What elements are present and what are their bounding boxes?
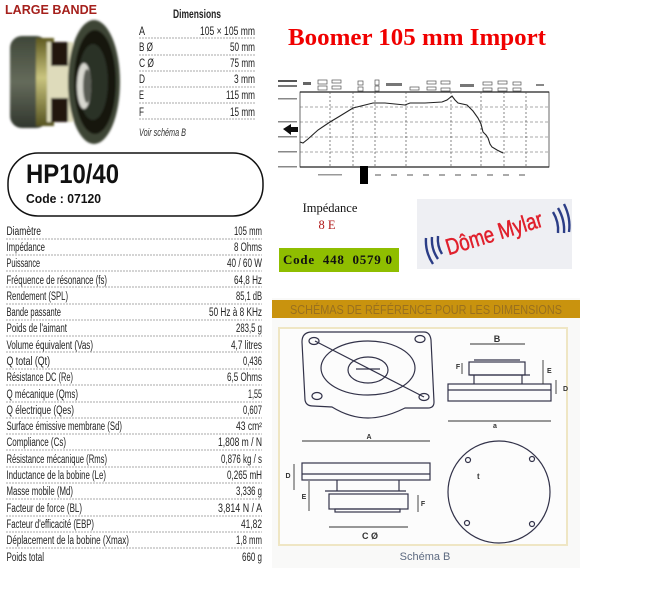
- table: specifications: 41,82: [241, 519, 262, 531]
- caption: schema B: Schéma B: [400, 551, 450, 563]
- table: dimensions: B Ø: [139, 40, 153, 54]
- diagram: side view bottom: [285, 434, 430, 541]
- table: specifications: Surface émissive membrane (Sd): [6, 421, 122, 433]
- table: specifications: Facteur de force (BL): [6, 503, 82, 515]
- table: specifications: Résistance mécanique (Rms): [6, 454, 107, 466]
- table: specifications: 0,436: [243, 356, 262, 368]
- badge: dome mylar: Dôme Mylar: [442, 206, 546, 260]
- diagram: side view top: [448, 334, 568, 430]
- table: specifications: Q électrique (Qes): [6, 405, 74, 417]
- diagram: round view: [448, 441, 550, 543]
- table: specifications: 40 / 60 W: [227, 258, 262, 270]
- diagram: side view top: B: [494, 334, 501, 344]
- table: specifications: Inductance de la bobine (Le): [6, 470, 106, 482]
- table: dimensions: D: [139, 72, 145, 86]
- table: dimensions: 75 mm: [230, 56, 255, 70]
- table: dimensions: 50 mm: [230, 40, 255, 54]
- diagram: front plate: [302, 332, 434, 418]
- diagram: side view bottom: A: [366, 434, 372, 441]
- diagram: side view bottom: D: [285, 473, 291, 480]
- table: specifications: 1,8 mm: [236, 535, 262, 547]
- diagram: side view top: F: [456, 364, 461, 371]
- table: dimensions: 3 mm: [234, 72, 255, 86]
- table: dimensions: 105 × 105 mm: [200, 24, 255, 38]
- table: specifications: 64,8 Hz: [234, 275, 262, 287]
- table: specifications: Fréquence de résonance (fs): [6, 275, 107, 287]
- diagram: side view bottom: F: [421, 501, 426, 508]
- diagram: side view top: E: [547, 368, 552, 375]
- table: specifications: 50 Hz à 8 KHz: [209, 307, 262, 319]
- table: specifications: Poids de l'aimant: [6, 323, 68, 335]
- table: specifications: Puissance: [6, 258, 40, 270]
- table: specifications: 660 g: [242, 552, 262, 564]
- diagram: side view top: D: [563, 386, 568, 393]
- table: specifications: 1,808 m / N: [218, 437, 262, 449]
- table: dimensions: [139, 24, 255, 139]
- model badge: HP10/40: [8, 153, 263, 216]
- table: dimensions: 115 mm: [226, 88, 255, 102]
- table: specifications: 43 cm²: [236, 421, 262, 433]
- table: specifications: 3,814 N / A: [218, 503, 262, 515]
- badge: product code: Code 448 0579 0: [283, 252, 392, 267]
- table: specifications: Q total (Qt): [6, 356, 50, 368]
- label: impedance: 8 E: [318, 218, 336, 232]
- title: Boomer 105 mm Import: [288, 25, 546, 51]
- icon: left arrow: [283, 124, 298, 135]
- table: dimensions: Voir schéma B: [139, 127, 186, 139]
- table: specifications: 85,1 dB: [236, 291, 262, 303]
- table: specifications: 283,5 g: [236, 323, 262, 335]
- table: specifications: Résistance DC (Re): [6, 372, 73, 384]
- table: specifications: [6, 226, 262, 564]
- diagram: side view bottom: E: [302, 494, 307, 501]
- table: specifications: 6,5 Ohms: [227, 372, 262, 384]
- table: dimensions: 15 mm: [230, 105, 255, 119]
- table: specifications: Compliance (Cs): [6, 437, 66, 449]
- heading: dimensions: Dimensions: [173, 7, 221, 21]
- table: specifications: Rendement (SPL): [6, 291, 68, 303]
- table: specifications: 4,7 litres: [231, 340, 262, 352]
- table: specifications: 1,55: [248, 389, 262, 401]
- label: impedance: Impédance: [303, 201, 358, 215]
- chart: frequency response: [278, 80, 549, 184]
- panel: reference schematics: [272, 298, 580, 568]
- table: specifications: Q mécanique (Qms): [6, 389, 78, 401]
- table: specifications: Diamètre: [6, 226, 41, 238]
- table: dimensions: E: [139, 88, 144, 102]
- diagram: side view top: a: [493, 423, 497, 430]
- category label: large bande: LARGE BANDE: [5, 3, 97, 17]
- model badge: HP10/40: Code : 07120: [26, 191, 101, 206]
- label: impedance: [303, 201, 358, 232]
- table: specifications: Facteur d'efficacité (EBP): [6, 519, 94, 531]
- badge: product code: [279, 248, 399, 272]
- table: specifications: 105 mm: [234, 226, 262, 238]
- diagram: side view bottom: C Ø: [362, 531, 378, 541]
- model badge: HP10/40: HP10/40: [26, 159, 119, 189]
- table: specifications: 0,607: [243, 405, 262, 417]
- heading band: SCHÉMAS DE RÉFÉRENCE POUR LES DIMENSIONS: [290, 302, 562, 317]
- table: specifications: Volume équivalent (Vas): [6, 340, 93, 352]
- table: specifications: Poids total: [6, 552, 44, 564]
- table: dimensions: F: [139, 105, 144, 119]
- diagram: round view: t: [477, 472, 480, 481]
- table: specifications: Impédance: [6, 242, 45, 254]
- table: specifications: Masse mobile (Md): [6, 486, 73, 498]
- table: specifications: Bande passante: [6, 307, 61, 319]
- icon: speaker photo: [10, 20, 120, 144]
- table: specifications: 3,336 g: [236, 486, 262, 498]
- table: specifications: 0,265 mH: [227, 470, 262, 482]
- table: specifications: 0,876 kg / s: [221, 454, 262, 466]
- table: dimensions: A: [139, 24, 145, 38]
- table: specifications: 8 Ohms: [234, 242, 262, 254]
- table: specifications: Déplacement de la bobine (Xmax): [6, 535, 129, 547]
- table: dimensions: C Ø: [139, 56, 154, 70]
